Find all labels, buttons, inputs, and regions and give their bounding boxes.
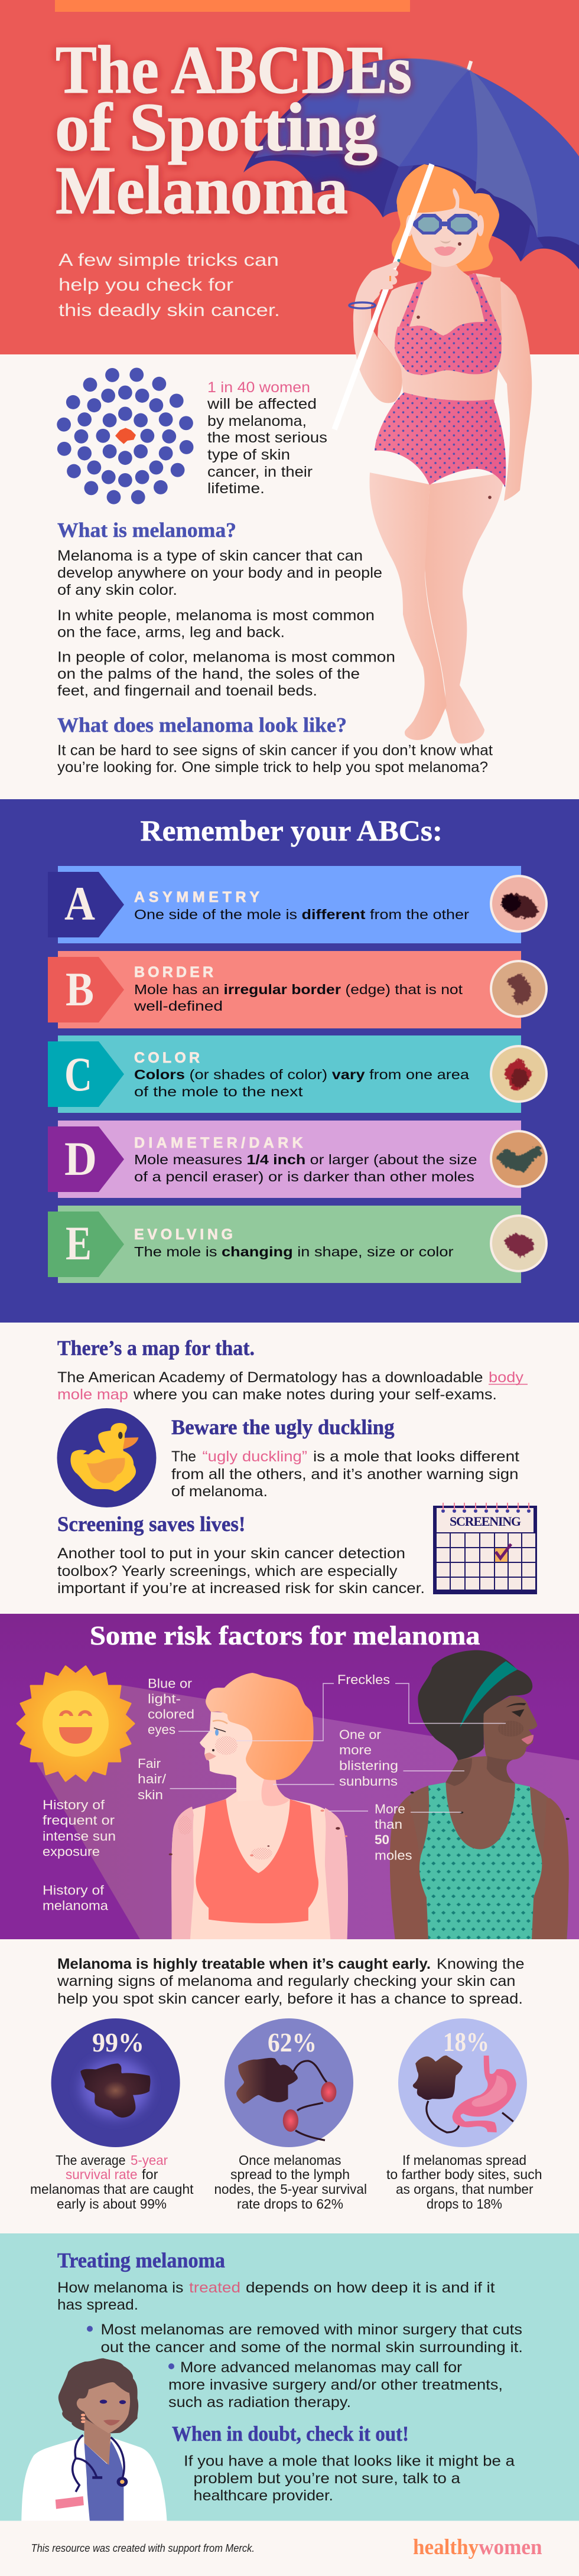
- text: melanoma definition: on the palms of the hand, the soles of the: [57, 666, 360, 682]
- text: yearly screenings: important if you’re at increased risk for skin cancer.: [57, 1580, 425, 1597]
- row: color: C: [64, 1047, 92, 1101]
- woman sunglasses: [413, 214, 477, 235]
- row: color: [48, 1035, 547, 1113]
- row: asymmetry: A: [64, 877, 95, 930]
- row: evolving: [48, 1206, 547, 1283]
- row: border: Mole has an irregular border (edge) that is not: [134, 982, 463, 997]
- bullet: minor surgery: [87, 2321, 523, 2356]
- stat circle: 62%: [225, 2018, 353, 2147]
- logo: healthywomen: healthywomen: [413, 2535, 542, 2559]
- text: yearly screenings: toolbox? Yearly screenings, which are especially: [57, 1563, 398, 1580]
- text: ugly duckling: “ugly duckling”: [202, 1448, 307, 1465]
- labels: risk factors: skin: [138, 1787, 163, 1802]
- text: body mole map: The American Academy of Dermatology has a downloadable: [57, 1369, 483, 1386]
- labels: risk factors: colored: [148, 1707, 194, 1721]
- text: one simple trick: you’re looking for. One simple trick to help you spot melanoma?: [57, 759, 488, 776]
- bullet: minor surgery: out the cancer and some of the normal skin surrounding it.: [100, 2339, 523, 2356]
- labels: risk factors: blistering: [339, 1758, 398, 1773]
- dark woman face: [483, 1696, 537, 1760]
- row: color: Colors (or shades of color) vary from one area: [134, 1067, 470, 1082]
- fair woman arms: [171, 1807, 194, 1940]
- panel: treating melanoma: [0, 2233, 579, 2521]
- stat circle: 99%: 99%: [92, 2027, 144, 2057]
- text: one simple trick: It can be hard to see signs of skin cancer if you don’t know what: [57, 742, 493, 758]
- text: melanoma definition: feet, and fingernail and toenail beds.: [57, 683, 317, 699]
- text: talk to a provider: If you have a mole that looks like it might be a: [184, 2453, 515, 2469]
- labels: risk factors: Fair: [138, 1756, 161, 1771]
- caption: 99%: 5-year: [131, 2152, 168, 2168]
- row: border: BORDER: [134, 964, 213, 981]
- moles on body: [417, 315, 492, 499]
- labels: risk factors: light-: [148, 1692, 181, 1706]
- caption: 99%: for: [142, 2167, 158, 2182]
- text: yearly screenings: [57, 1545, 425, 1597]
- row: diameter/dark: D: [64, 1132, 97, 1186]
- text: ugly duckling: from all the others, and it’s another warning sign: [171, 1466, 519, 1483]
- labels: risk factors: melanoma: [43, 1898, 109, 1913]
- dark woman moles: [410, 1792, 570, 1820]
- caption: 18%: If melanomas spread: [402, 2152, 526, 2168]
- row: evolving: E: [66, 1216, 92, 1270]
- orange top bar: [55, 0, 410, 12]
- row: diameter/dark: of a pencil eraser) or is darker than other moles: [134, 1169, 474, 1184]
- woman left arm: [353, 278, 402, 403]
- dark woman eye and brow: [506, 1703, 526, 1717]
- labels: risk factors: [43, 1672, 412, 1913]
- dark woman hair: [418, 1650, 532, 1760]
- bullet: advanced melanomas: [168, 2359, 503, 2411]
- woman right leg: [425, 473, 504, 744]
- caption: 62%: Once melanomas: [239, 2152, 341, 2168]
- caption: 62%: [214, 2152, 367, 2212]
- caption: 99%: survival rate: [66, 2167, 137, 2182]
- green tank top: [419, 1782, 542, 1940]
- umbrella pole: [334, 164, 432, 429]
- row: asymmetry: One side of the mole is different from the other: [134, 907, 469, 922]
- woman face: [409, 188, 479, 267]
- text: body mole map: [57, 1369, 528, 1403]
- bikini bottom: [375, 392, 506, 487]
- woman hair: [392, 164, 499, 272]
- panel: survival rates: [30, 1956, 542, 2212]
- text: talk to a provider: healthcare provider.: [194, 2487, 333, 2504]
- labels: risk factors: One or: [339, 1727, 382, 1742]
- labels: risk factors: 50: [375, 1832, 389, 1847]
- heading: when in doubt: When in doubt, check it out!: [172, 2422, 409, 2445]
- doctor earrings: [81, 2414, 85, 2423]
- row: border: [48, 951, 547, 1028]
- text: how melanoma is treated: treated: [189, 2279, 240, 2296]
- caption: 99%: The average: [56, 2152, 125, 2168]
- labels: risk factors: Blue or: [148, 1676, 193, 1691]
- fair woman lips: [204, 1753, 216, 1760]
- illustration: doctor: [21, 2358, 167, 2521]
- fair woman face: [200, 1712, 277, 1784]
- heading: there's a map for that: There’s a map for that.: [57, 1336, 255, 1360]
- caption: 62%: spread to the lymph: [230, 2167, 350, 2182]
- stethoscope chest piece: [92, 2476, 128, 2487]
- caption: 62%: rate drops to 62%: [237, 2196, 343, 2212]
- labels: risk factors: frequent or: [43, 1813, 115, 1828]
- text: highly treatable: Knowing the: [437, 1956, 525, 1972]
- fair woman pink spots: [250, 1810, 347, 1857]
- panel: remember your ABCs: [0, 799, 579, 1323]
- stat circle: 99%: [51, 2018, 180, 2147]
- treating background: [0, 2233, 579, 2521]
- doctor scrubs: [84, 2441, 123, 2521]
- labels: risk factors: eyes: [148, 1722, 175, 1737]
- risk factors background: [0, 1614, 579, 1939]
- heading: remember your ABCs: Remember your ABCs:: [141, 814, 443, 847]
- stat: 1 in 40 women: by melanoma,: [207, 413, 307, 429]
- coral tank top: [196, 1799, 318, 1923]
- fair woman moles: [169, 1827, 340, 1855]
- labels: risk factors: History of: [43, 1797, 105, 1812]
- text: talk to a provider: [184, 2453, 515, 2504]
- text: talk to a provider: problem but you’re not sure, talk to a: [194, 2470, 460, 2487]
- stat circle: 18%: [398, 2018, 527, 2147]
- title: [55, 32, 412, 228]
- fair woman eye and brow: [213, 1721, 227, 1735]
- text: highly treatable: Melanoma is highly treatable when it’s caught early.: [57, 1956, 431, 1972]
- subtitle: A few simple tricks can: [58, 250, 279, 270]
- text: melanoma definition: In white people, melanoma is most common: [57, 607, 375, 624]
- panel: risk factors: [0, 1614, 579, 1940]
- title: Melanoma: [56, 153, 348, 228]
- icon: smiling sun: [17, 1666, 134, 1781]
- text: yearly screenings: Another tool to put in your skin cancer detection: [57, 1545, 405, 1562]
- icon: screening calendar: [433, 1503, 537, 1594]
- fair woman face mole: [212, 1749, 214, 1751]
- hero background: [0, 0, 579, 354]
- illustration: sunbathing woman: [334, 164, 532, 744]
- row: evolving: EVOLVING: [134, 1226, 233, 1243]
- caption: 18%: drops to 18%: [427, 2196, 502, 2212]
- text: highly treatable: help you spot skin cancer early, before it has a chance to spread.: [57, 1991, 523, 2007]
- text: body mole map: mole map: [57, 1386, 128, 1403]
- doctor face: [77, 2382, 130, 2434]
- row: border: B: [66, 962, 94, 1016]
- title: of Spotting: [55, 90, 378, 165]
- teal headband: [460, 1661, 518, 1728]
- stat: 1 in 40 women: the most serious: [207, 429, 327, 446]
- labels: risk factors: sunburns: [339, 1774, 398, 1789]
- doctor name badge: [56, 2496, 84, 2509]
- illustration: dark-skinned woman: [390, 1650, 570, 1940]
- text: ugly duckling: The: [171, 1448, 196, 1465]
- subtitle: [58, 250, 280, 320]
- footer: [31, 2535, 542, 2559]
- row: border: well-defined: [134, 998, 223, 1014]
- mole on cheek: [458, 242, 461, 246]
- text: one simple trick: [57, 742, 493, 776]
- woman ears: [406, 215, 484, 236]
- row: diameter/dark: [48, 1121, 547, 1198]
- bullet: advanced melanomas: such as radiation therapy.: [168, 2394, 351, 2411]
- caption: 62%: nodes, the 5-year survival: [214, 2181, 367, 2197]
- row: diameter/dark: DIAMETER/DARK: [134, 1135, 302, 1151]
- dark woman freckles: [497, 1721, 523, 1737]
- labels: risk factors: moles: [375, 1848, 412, 1863]
- heading: what is melanoma: What is melanoma?: [57, 519, 236, 542]
- labels: risk factors: More: [375, 1802, 405, 1816]
- doctor stethoscope: [73, 2435, 124, 2492]
- dark woman lips: [521, 1735, 534, 1744]
- text: how melanoma is treated: has spread.: [57, 2297, 138, 2313]
- bikini top: [395, 273, 502, 375]
- caption: 18%: as organs, that number: [396, 2181, 534, 2197]
- sponsor note: This resource was created with support from Merck.: [31, 2542, 255, 2554]
- bullet: advanced melanomas: more invasive surgery and/or other treatments,: [168, 2377, 503, 2393]
- labels: risk factors: than: [375, 1817, 402, 1832]
- doctor coat: [21, 2437, 167, 2521]
- panel: what is melanoma: [57, 367, 493, 776]
- bracelet: [349, 302, 375, 308]
- text: body mole map: body: [489, 1369, 524, 1386]
- illustration: fair-skinned woman: [169, 1673, 348, 1940]
- heading: treating melanoma: Treating melanoma: [57, 2248, 225, 2272]
- fair woman body: [171, 1775, 348, 1940]
- woman left leg: [369, 473, 447, 740]
- stat: 1 in 40 women: lifetime.: [207, 480, 265, 497]
- labels: risk factors: hair/: [138, 1771, 167, 1786]
- icon: screening calendar: SCREENING: [450, 1514, 521, 1529]
- row: color: of the mole to the next: [134, 1084, 303, 1099]
- stat: 1 in 40 women: [207, 379, 327, 497]
- caption: 99%: early is about 99%: [57, 2196, 167, 2212]
- stat: 1 in 40 women: cancer, in their: [207, 464, 313, 480]
- stat: 1 in 40 women: will be affected: [207, 396, 317, 412]
- sun light beam: [37, 1685, 579, 1939]
- caption: 99%: [30, 2152, 194, 2212]
- text: ugly duckling: is a mole that looks different: [313, 1448, 519, 1465]
- woman hand: [354, 259, 401, 305]
- text: ugly duckling: [171, 1448, 519, 1500]
- doctor hair: [58, 2358, 138, 2433]
- text: how melanoma is treated: [57, 2279, 495, 2313]
- title: risk factors: Some risk factors for melanoma: [90, 1620, 480, 1650]
- fair woman hair: [206, 1673, 314, 1780]
- row: color: COLOR: [134, 1050, 200, 1066]
- stat circle: 62%: 62%: [268, 2027, 317, 2057]
- caption: 99%: melanomas that are caught: [30, 2181, 194, 2197]
- caption: 18%: [386, 2152, 542, 2212]
- labels: risk factors: History of: [43, 1883, 105, 1897]
- stat circle: 18%: 18%: [443, 2027, 489, 2057]
- heading: beware the ugly duckling: Beware the ugly duckling: [171, 1415, 395, 1439]
- labels: risk factors: exposure: [43, 1844, 100, 1859]
- row: evolving: The mole is changing in shape, size or color: [134, 1244, 454, 1259]
- doctor neck: [84, 2418, 111, 2465]
- doctor lips: [103, 2419, 120, 2425]
- text: how melanoma is treated: depends on how deep it is and if it: [246, 2279, 495, 2296]
- woman torso: [378, 263, 502, 402]
- text: how melanoma is treated: How melanoma is: [57, 2279, 183, 2296]
- bullet: advanced melanomas: More advanced melanomas may call for: [180, 2359, 462, 2376]
- dark woman body: [390, 1756, 568, 1940]
- stat: 1 in 40 women: type of skin: [207, 447, 290, 463]
- fair woman freckles: [178, 1736, 272, 1859]
- row: asymmetry: [48, 866, 547, 943]
- heading: what does melanoma look like: What does melanoma look like?: [57, 714, 347, 737]
- woman nose and lips: [434, 240, 456, 256]
- row: asymmetry: ASYMMETRY: [134, 889, 259, 906]
- chart: 1 in 40 dots: [57, 367, 194, 504]
- stat: 1 in 40 women: 1 in 40 women: [207, 379, 310, 396]
- labels: risk factors: intense sun: [43, 1829, 116, 1844]
- text: highly treatable: warning signs of melanoma and regularly checking your skin can: [57, 1973, 515, 1989]
- text: melanoma definition: In people of color, melanoma is most common: [57, 649, 395, 665]
- text: melanoma definition: [57, 548, 395, 699]
- text: melanoma definition: develop anywhere on your body and in people: [57, 565, 382, 581]
- labels: risk factors: more: [339, 1743, 372, 1757]
- text: ugly duckling: of melanoma.: [171, 1483, 268, 1500]
- subtitle: this deadly skin cancer.: [58, 301, 280, 320]
- dark woman arms: [390, 1849, 395, 1939]
- heading: screening saves lives: Screening saves lives!: [57, 1512, 246, 1536]
- title: The ABCDEs: [56, 32, 412, 108]
- panel: self-check tips: [57, 1336, 537, 1597]
- subtitle: help you check for: [58, 275, 233, 295]
- text: highly treatable: [57, 1956, 525, 2007]
- labels: risk factors: Freckles: [337, 1672, 390, 1687]
- doctor eyes: [100, 2399, 126, 2404]
- illustration: umbrella: [243, 58, 579, 269]
- bullet: minor surgery: Most melanomas are removed with minor surgery that cuts: [100, 2321, 522, 2338]
- text: melanoma definition: on the face, arms, leg and back.: [57, 624, 285, 640]
- dark woman neck shadow: [445, 1756, 515, 1786]
- fair woman neck shadow: [261, 1779, 290, 1806]
- text: melanoma definition: of any skin color.: [57, 582, 177, 598]
- ABC section background: [0, 799, 579, 1323]
- icon: ugly duckling: [57, 1408, 156, 1507]
- text: melanoma definition: Melanoma is a type of skin cancer that can: [57, 548, 363, 564]
- text: body mole map: where you can make notes during your self-exams.: [133, 1386, 497, 1403]
- leader lines: [170, 1683, 506, 1812]
- woman right arm: [473, 273, 532, 501]
- tank top pattern: [419, 1782, 542, 1940]
- row: diameter/dark: Mole measures 1/4 inch or larger (about the size: [134, 1152, 477, 1167]
- panel: hero: [0, 0, 579, 744]
- caption: 18%: to farther body sites, such: [386, 2167, 542, 2182]
